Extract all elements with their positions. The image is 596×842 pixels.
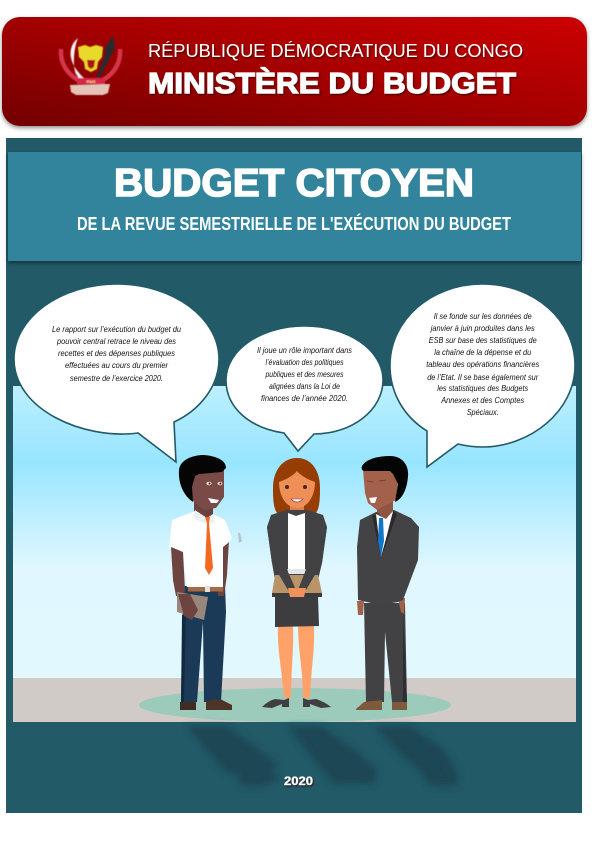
bubble text: pouvoir central retrace le niveau des — [56, 336, 177, 346]
left arm — [171, 547, 185, 596]
bubble text: Il joue un rôle important dans — [257, 345, 353, 355]
bubble text: Spéciaux. — [467, 407, 499, 417]
jacket body — [267, 510, 327, 580]
neck — [290, 502, 304, 516]
header background — [2, 17, 587, 126]
bubble text: finances de l’année 2020. — [261, 393, 348, 403]
bubble text: la chaîne de la dépense et du — [434, 347, 531, 357]
bubble text: Il se fonde sur les données de — [434, 311, 532, 321]
skirt — [275, 596, 319, 627]
white shirt — [169, 511, 232, 587]
hands — [288, 588, 306, 597]
face — [363, 470, 398, 510]
header banner — [2, 17, 587, 126]
bubble text: Annexes et des Comptes — [440, 395, 525, 405]
bubble text — [52, 324, 181, 383]
jacket hem — [272, 593, 322, 597]
white blouse — [288, 513, 305, 572]
bubble text: alignées dans la Loi de — [269, 381, 340, 391]
bubble text: janvier à juin produites dans les — [430, 323, 535, 333]
shoes — [262, 698, 289, 708]
book — [177, 592, 208, 620]
speech bubble: middle — [226, 326, 383, 451]
banner background — [8, 152, 581, 261]
bubble text — [426, 311, 540, 417]
bubble text: recettes et des dépenses publiques — [58, 348, 176, 358]
trousers — [181, 586, 226, 702]
speech bubble: left — [14, 284, 219, 462]
bubble text: les statistiques des Budgets — [437, 383, 529, 393]
main teal panel — [6, 138, 582, 813]
figure shadows — [186, 726, 458, 786]
bubble text: Le rapport sur l’exécution du budget du — [52, 324, 181, 334]
jacket arms — [267, 518, 296, 590]
title banner — [8, 152, 581, 261]
lapels — [372, 511, 397, 558]
ground ellipse — [139, 688, 451, 722]
orange tie — [205, 517, 213, 575]
bubble shape — [390, 284, 575, 467]
hands — [357, 601, 364, 615]
sky — [13, 386, 576, 679]
speech bubble: right — [390, 284, 575, 467]
illustration background — [13, 386, 576, 722]
shoes — [180, 702, 196, 710]
figure: woman with folder — [262, 458, 331, 708]
right arm — [218, 540, 229, 596]
bubble text: ESB sur base des statistiques de — [429, 335, 537, 345]
bubble text: de l’Etat. Il se base également sur — [427, 372, 539, 382]
subtitle: DE LA REVUE SEMESTRIELLE DE L'EXÉCUTION DU BUDGET — [77, 213, 511, 234]
face — [190, 468, 224, 510]
year label: 2020 — [284, 774, 313, 788]
bubble text: l’évaluation des politiques — [266, 357, 344, 367]
bubble shape — [14, 284, 219, 462]
ground — [13, 678, 576, 722]
blue tie — [378, 518, 384, 557]
face — [279, 471, 315, 508]
closed eyes and mouth — [367, 480, 386, 482]
small pin detail — [238, 533, 242, 543]
bubble text: effectuées au cours du premier — [65, 360, 169, 370]
collar — [193, 510, 215, 524]
icon: coat of arms — [61, 35, 120, 95]
shoes — [356, 700, 382, 710]
bubble text — [257, 345, 353, 403]
header line 1: RÉPUBLIQUE DÉMOCRATIQUE DU CONGO — [148, 41, 523, 61]
title: BUDGET CITOYEN — [114, 162, 474, 205]
shirt — [376, 511, 393, 557]
suit jacket — [357, 510, 419, 605]
eyes and mouth — [285, 485, 289, 489]
hand — [178, 594, 198, 620]
eyes and smile — [206, 482, 212, 485]
hair — [362, 456, 408, 502]
hair — [179, 455, 226, 502]
neck — [194, 495, 213, 519]
neck — [377, 500, 393, 520]
header line 2: MINISTÈRE DU BUDGET — [148, 66, 516, 100]
belt — [188, 587, 223, 592]
figure: man with orange tie — [169, 455, 242, 710]
bubble shape — [226, 326, 383, 451]
icon: coat of arms: PAIX — [86, 79, 96, 84]
trousers — [364, 603, 407, 702]
legs — [278, 626, 293, 698]
folder — [272, 575, 322, 593]
figure: man in grey suit with blue tie — [356, 456, 419, 710]
bubble text: tableau des opérations financières — [426, 359, 540, 369]
bubble text: publiques et des mesures — [265, 369, 344, 379]
bubble text: semestre de l’exercice 2020. — [70, 373, 163, 383]
hair back — [273, 458, 320, 515]
